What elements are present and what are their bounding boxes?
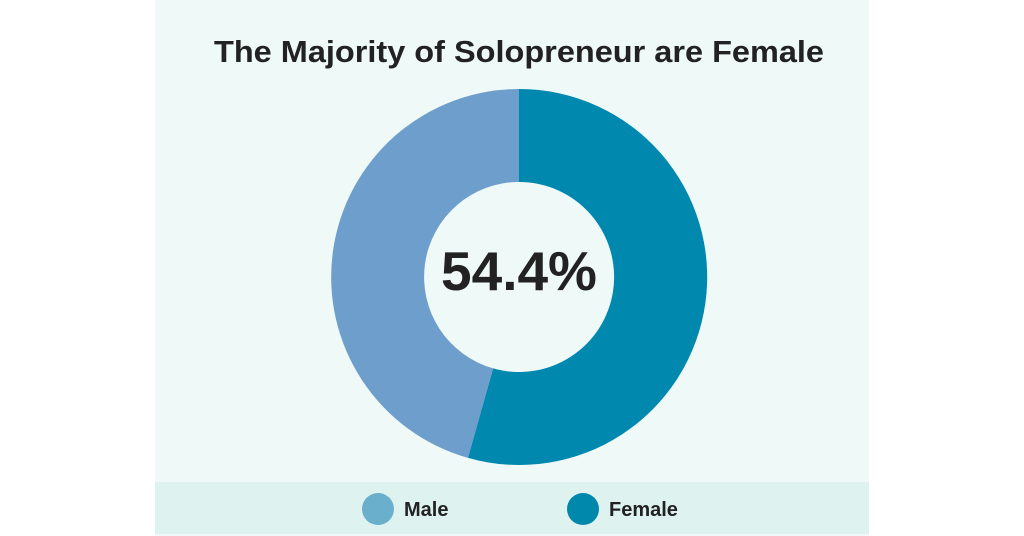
- center value: 54.4%: [441, 240, 597, 302]
- segment: male: [331, 89, 519, 458]
- segment: female: [468, 89, 707, 465]
- panel background: [155, 0, 869, 536]
- donut chart: [331, 89, 707, 465]
- legend item: male: [362, 493, 448, 525]
- legend item: female: [567, 493, 678, 525]
- legend: [155, 482, 869, 534]
- legend item: female: Female: [609, 499, 678, 521]
- legend item: male: Male: [404, 499, 448, 521]
- title: The Majority of Solopreneur are Female: [214, 34, 824, 69]
